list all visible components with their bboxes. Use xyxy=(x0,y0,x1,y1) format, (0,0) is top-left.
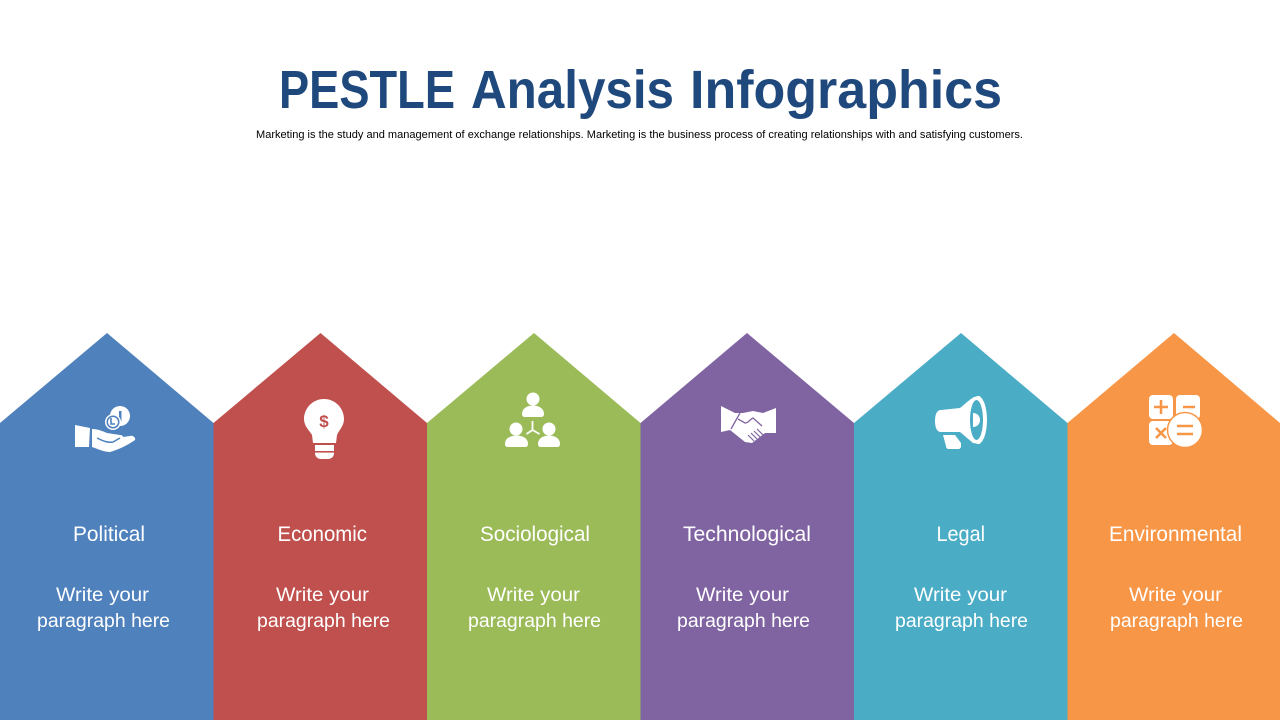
panel: sociological xyxy=(427,333,640,720)
text: political paragraph xyxy=(37,585,170,632)
icon: three people network xyxy=(505,392,560,447)
panel: economic xyxy=(214,333,427,720)
title: PESTLE xyxy=(279,60,455,120)
text: economic paragraph: paragraph here xyxy=(257,611,390,632)
text: legal paragraph xyxy=(895,585,1028,632)
text: legal paragraph: Write your xyxy=(914,585,1008,606)
label: environmental: Environmental xyxy=(1109,523,1242,546)
icon: calculator xyxy=(1149,395,1202,448)
title: Analysis xyxy=(471,60,674,120)
text: sociological paragraph: Write your xyxy=(487,585,581,606)
text: environmental paragraph: Write your xyxy=(1129,585,1223,606)
text: political paragraph: Write your xyxy=(56,585,150,606)
panel: legal xyxy=(854,333,1068,720)
label: economic: Economic xyxy=(278,523,367,546)
text: environmental paragraph: paragraph here xyxy=(1110,611,1243,632)
text: political paragraph: paragraph here xyxy=(37,611,170,632)
text: legal paragraph: paragraph here xyxy=(895,611,1028,632)
icon: light bulb: $ xyxy=(319,412,329,431)
text: environmental paragraph xyxy=(1110,585,1243,632)
text: sociological paragraph xyxy=(468,585,601,632)
title xyxy=(279,60,1002,120)
label: technological: Technological xyxy=(683,523,811,546)
label: legal: Legal xyxy=(936,523,985,546)
title: Infographics xyxy=(690,60,1002,120)
panel: political xyxy=(0,333,214,720)
text: technological paragraph: paragraph here xyxy=(677,611,810,632)
icon: handshake xyxy=(721,406,776,443)
panel: technological xyxy=(640,333,854,720)
icon: hand with coins xyxy=(75,406,135,452)
icon: megaphone xyxy=(935,396,987,449)
text: sociological paragraph: paragraph here xyxy=(468,611,601,632)
icon: light bulb xyxy=(304,399,344,459)
text: technological paragraph: Write your xyxy=(696,585,790,606)
text: economic paragraph xyxy=(257,585,390,632)
panel: environmental xyxy=(1068,333,1280,720)
label: political: Political xyxy=(73,523,145,546)
label: sociological: Sociological xyxy=(480,523,590,546)
text: technological paragraph xyxy=(677,585,810,632)
subtitle: Marketing is the study and management of exchange relationships. Marketing is the business process of creating relationships with and satisfying customers. xyxy=(256,129,1023,141)
text: economic paragraph: Write your xyxy=(276,585,370,606)
